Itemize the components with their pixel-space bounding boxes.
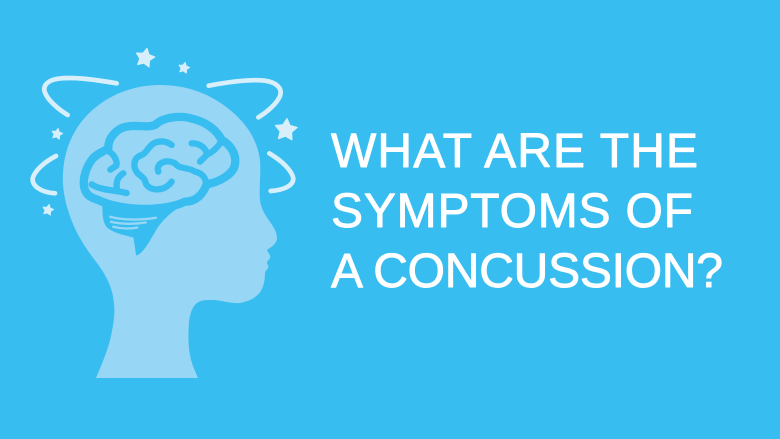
star 4 bbox=[50, 127, 64, 140]
ring top left bbox=[44, 78, 117, 115]
brain stem bbox=[103, 207, 178, 254]
stars bbox=[41, 46, 298, 216]
cerebellum lines bbox=[109, 217, 157, 229]
title: SYMPTOMS OF bbox=[331, 185, 693, 238]
ring lower left bbox=[33, 156, 56, 193]
brain outline bbox=[84, 117, 235, 209]
ring top right bbox=[209, 80, 281, 117]
star 3 bbox=[274, 118, 298, 140]
star 2 bbox=[177, 61, 191, 74]
head silhouette bbox=[63, 85, 277, 378]
title: A CONCUSSION? bbox=[331, 245, 723, 298]
ring lower right bbox=[269, 153, 293, 191]
title bbox=[331, 125, 723, 298]
star 1 bbox=[134, 46, 156, 68]
inner brain folds bbox=[92, 141, 222, 193]
brain icon bbox=[84, 117, 235, 254]
star 5 bbox=[41, 203, 55, 216]
dizzy rings bbox=[33, 78, 293, 193]
title: WHAT ARE THE bbox=[331, 125, 698, 178]
